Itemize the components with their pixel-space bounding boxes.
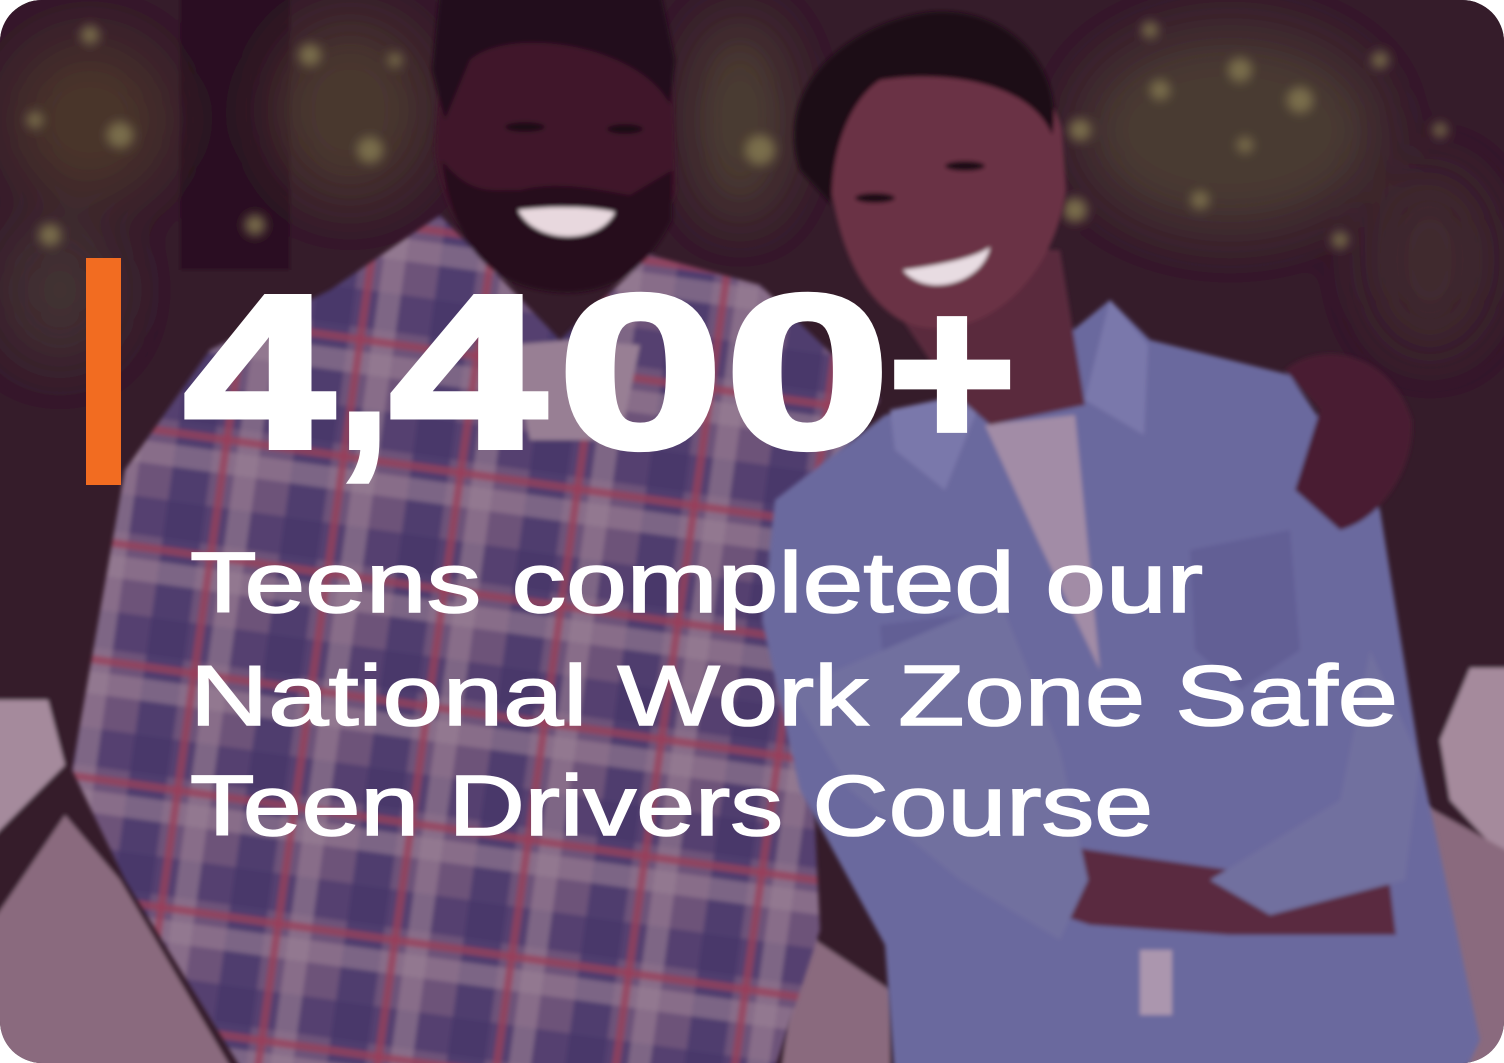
description text: Teens completed our [190,536,1203,631]
son t-shirt hem [1140,950,1172,1015]
description text: Teen Drivers Course [190,759,1153,854]
orange accent bar [86,258,121,485]
description text [190,536,1398,854]
son neck and head [904,248,1087,427]
white vehicles in background [0,668,1504,1063]
big number: + [888,251,1016,494]
person: father [72,0,880,1063]
son shirt pockets [882,532,1298,687]
big number: 0 [725,251,890,494]
big number: 0 [558,251,723,494]
big number: , [339,251,389,494]
description text: National Work Zone Safe [190,649,1398,744]
big number: 4 [184,251,334,494]
person: son [762,11,1480,1063]
son crossed arms [1069,846,1398,938]
son t-shirt [985,415,1100,670]
son shirt [762,300,1480,1063]
father shirt [72,215,880,1063]
father neck and head [435,7,676,290]
big number: 4 [390,251,546,494]
big number [184,251,1016,494]
arm on son's shoulder [1285,354,1412,530]
